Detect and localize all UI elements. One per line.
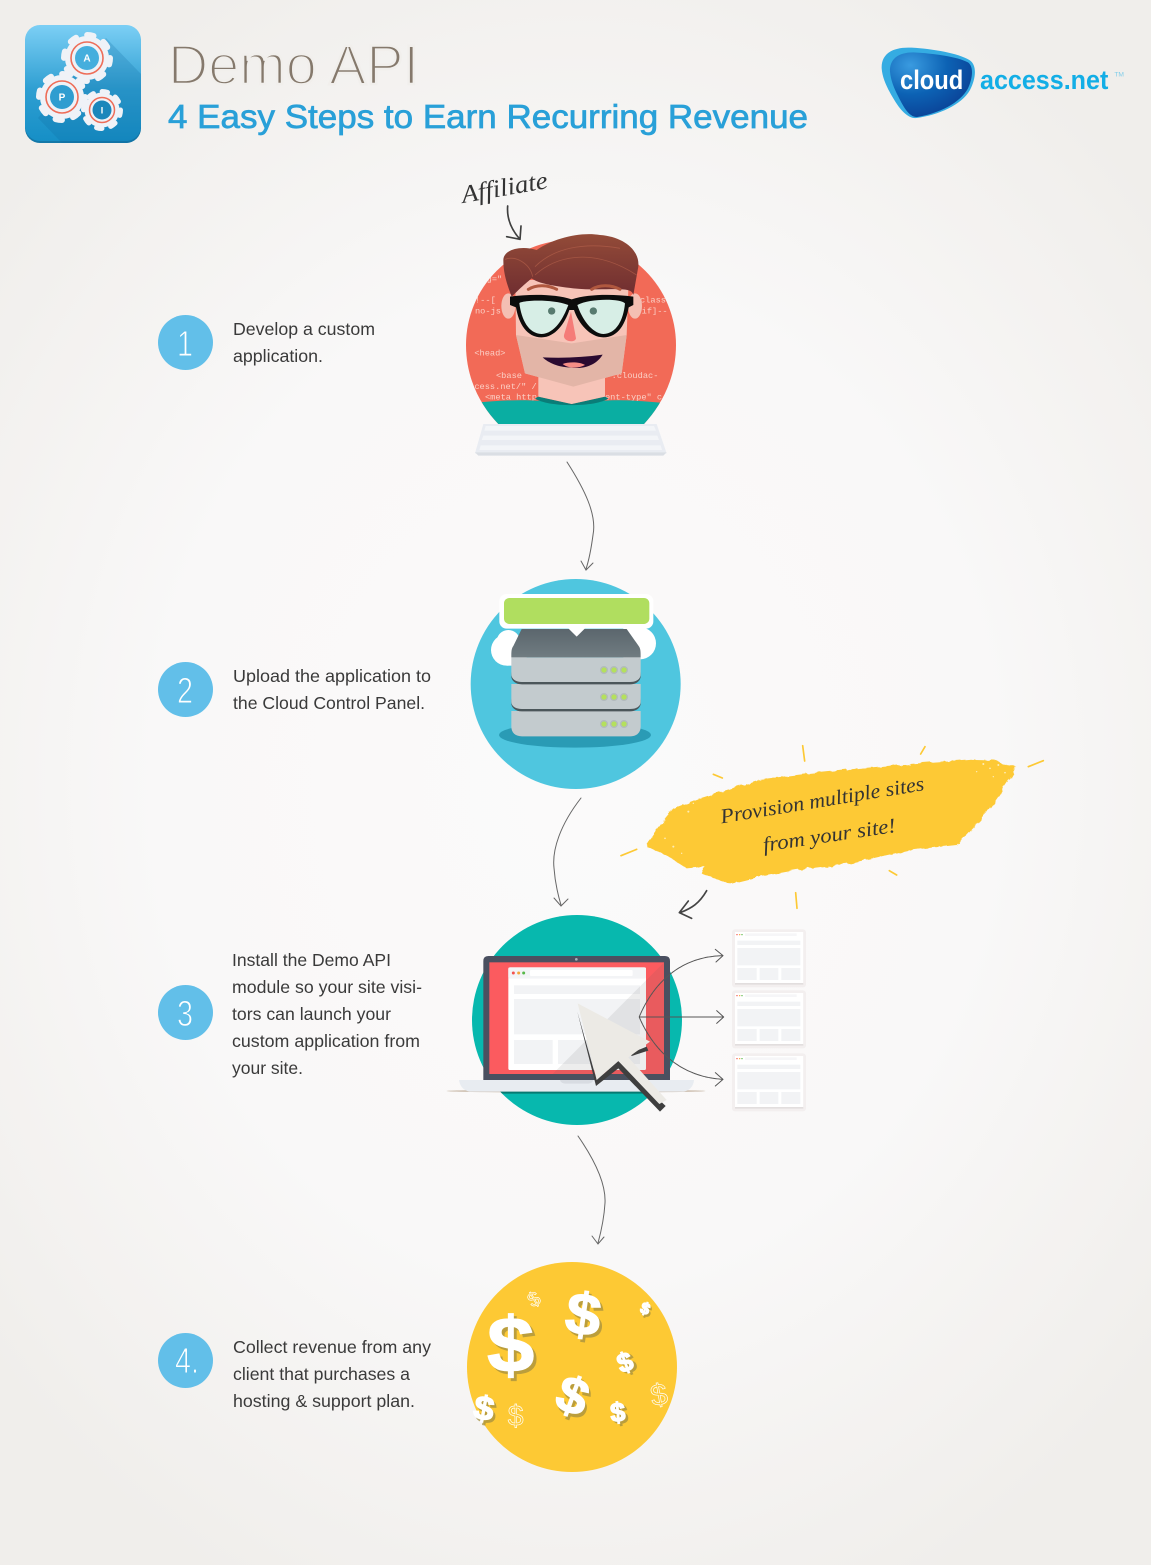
illustration: cloud server: [471, 579, 681, 789]
dollar signs: $: [550, 1368, 598, 1431]
step 1 badge: 1: [177, 323, 193, 364]
dollar signs: $: [638, 1300, 652, 1319]
callout: provision multiple sites: [621, 746, 1043, 918]
arrows to sites: [639, 949, 724, 1086]
arrow: callout to laptop: [679, 891, 707, 918]
title: Demo API: [168, 33, 419, 96]
step 3 text: module so your site visi-: [232, 977, 422, 997]
cursor: [577, 1003, 667, 1112]
lenses: [519, 300, 625, 334]
logo: cloudaccess.net: cloud: [900, 65, 963, 95]
dollar signs: $: [609, 1397, 627, 1428]
step 1 text: application.: [233, 346, 323, 366]
neck: [538, 375, 605, 404]
speech bubble: [499, 594, 653, 637]
step 4 text: Collect revenue from any: [233, 1337, 431, 1357]
server shadow: [499, 722, 651, 748]
ears: [501, 293, 642, 319]
illustration: laptop with cursor: [447, 915, 806, 1125]
step 2 text: the Cloud Control Panel.: [233, 693, 425, 713]
red circle with code: no-js: [475, 307, 501, 317]
mouth: [543, 355, 603, 368]
dollar signs: $: [524, 1288, 545, 1312]
laptop base: [459, 1080, 694, 1094]
logo: cloudaccess.net: access.net: [980, 65, 1108, 95]
dollar signs: $: [490, 1304, 537, 1392]
dollar signs: $: [648, 1378, 670, 1413]
red circle with code: <base: [496, 371, 522, 381]
step 3 text: custom application from: [232, 1031, 420, 1051]
keyboard: [475, 424, 667, 453]
arrow: step 2 to 3: [554, 798, 581, 906]
hair: [503, 234, 638, 297]
diagonal sheen: [547, 962, 664, 1080]
nose: [564, 312, 576, 341]
step 1 text: [233, 319, 375, 366]
brush speckles: [664, 763, 1006, 854]
red circle with code: !--[: [475, 296, 496, 306]
step 4 badge: 4.: [175, 1340, 199, 1381]
beard: [516, 335, 627, 387]
dollar signs: $: [616, 1347, 640, 1380]
brush stroke: [646, 759, 1017, 884]
logo: cloudaccess.net: [882, 48, 1124, 118]
laptop bezel: [483, 956, 670, 1080]
illustration: revenue dollars: [467, 1262, 677, 1472]
step 1 badge: [158, 315, 213, 370]
rays: [621, 746, 1043, 908]
callout text: Provision multiple sites: [718, 773, 926, 828]
step 3 text: [232, 950, 422, 1078]
red circle with code: .cloudac-: [612, 371, 658, 381]
step 3 badge: [158, 985, 213, 1040]
red circle with code: g=": [487, 275, 502, 285]
red circle with code: ent-type" c: [605, 392, 662, 402]
illustration: affiliate developer: [463, 206, 680, 456]
red circle with code: if]--: [642, 307, 668, 317]
server stack: [511, 629, 641, 736]
callout text: [718, 773, 926, 857]
red circle with code: <meta http: [485, 392, 537, 402]
dollar signs: $: [508, 1400, 524, 1432]
dollar signs: $: [613, 1346, 637, 1379]
app icon: gears: [25, 25, 141, 143]
gear P: P: [59, 92, 66, 104]
dollar signs: $: [564, 1282, 608, 1352]
clouds: [491, 627, 656, 666]
step 2 badge: [158, 662, 213, 717]
logo: cloudaccess.net: TM: [1114, 71, 1124, 78]
dollar signs: $: [471, 1389, 497, 1429]
dollar signs: $: [639, 1302, 653, 1321]
step 2 text: Upload the application to: [233, 666, 431, 686]
hair strands: [505, 246, 637, 277]
subtitle: 4 Easy Steps to Earn Recurring Revenue: [168, 98, 808, 135]
step 4 text: [233, 1337, 431, 1411]
arrow: affiliate pointer: [507, 206, 521, 239]
dollar signs: $: [473, 1392, 499, 1432]
gear I: I: [101, 106, 103, 116]
status lights: [600, 666, 628, 728]
step 2 badge: 2: [177, 670, 193, 711]
red circle with code: class: [640, 296, 666, 306]
screen: [489, 962, 664, 1074]
pupils: [548, 307, 597, 315]
callout text: from your site!: [761, 815, 897, 857]
mini site 3: [732, 1053, 806, 1111]
face: [515, 280, 629, 387]
dollar signs: $: [548, 1364, 596, 1428]
dollar signs: $: [487, 1302, 534, 1389]
dollar signs: [470, 1279, 670, 1432]
dollar signs: $: [562, 1279, 605, 1349]
glasses: [510, 295, 633, 337]
dollar signs: $: [611, 1399, 629, 1430]
affiliate label: Affiliate: [457, 167, 550, 209]
step 1 text: Develop a custom: [233, 319, 375, 339]
mini site 1: [732, 929, 806, 987]
red circle with code: <head>: [474, 349, 506, 359]
mini site 2: [732, 990, 806, 1048]
laptop shadow: [447, 1089, 705, 1093]
arrow: step 3 to 4: [578, 1136, 605, 1244]
gear A: A: [83, 54, 91, 64]
step 3 text: tors can launch your: [232, 1004, 391, 1024]
step 3 text: your site.: [232, 1058, 303, 1078]
arrow: step 1 to 2: [567, 462, 594, 570]
red circle with code: cess.net/" /: [474, 382, 537, 392]
step 2 text: [233, 666, 431, 713]
step 3 text: Install the Demo API: [232, 950, 391, 970]
browser window: [508, 967, 646, 1070]
step 3 badge: 3: [177, 993, 193, 1034]
step 4 text: client that purchases a: [233, 1364, 410, 1384]
red circle with code: [466, 241, 676, 424]
step 4 badge: [158, 1333, 213, 1388]
eyebrows: [528, 286, 620, 289]
step 4 text: hosting & support plan.: [233, 1391, 415, 1411]
